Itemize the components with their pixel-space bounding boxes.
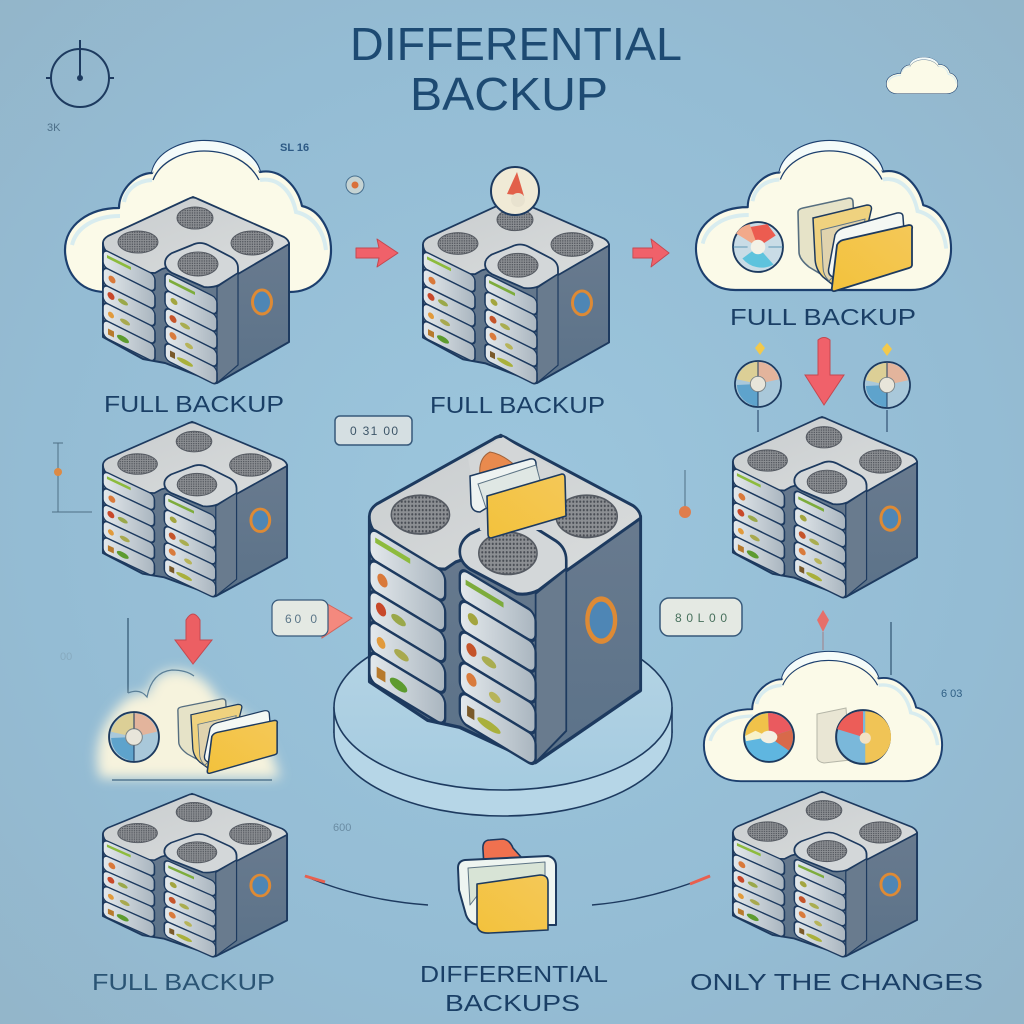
label: differential backups (420, 961, 608, 1016)
arrow: down left (175, 614, 212, 664)
arrow: first to second (356, 239, 398, 267)
server stack: bottom right (733, 792, 917, 958)
pie icon lower right 1 (744, 712, 794, 762)
title: DIFFERENTIAL (350, 18, 682, 70)
small tag top left: SL 16 (280, 142, 309, 154)
icon: small cloud top right (886, 57, 958, 94)
tag with arrow left of central server (272, 600, 352, 638)
tag above central server (335, 416, 412, 445)
small up indicator (817, 610, 829, 650)
label: full backup 4: FULL BACKUP (92, 969, 275, 995)
server stack: top middle (423, 199, 609, 385)
faint number right: 6 03 (941, 688, 962, 700)
label: full backup 1: FULL BACKUP (104, 391, 284, 417)
tag above central server: 0 31 00 (350, 424, 398, 438)
patch covering rear grille (468, 437, 552, 530)
cloud top right (696, 141, 951, 290)
faint number left: 00 (60, 651, 72, 663)
small orange indicator (346, 176, 364, 194)
connector left (305, 876, 428, 905)
blurred cloud lower left (97, 670, 280, 780)
pie icon lower left (109, 712, 159, 762)
pin left (127, 618, 129, 693)
server stack: top left (103, 197, 289, 386)
server stack: bottom left (103, 794, 287, 958)
icon: clock badge on top middle server (491, 167, 539, 215)
server stack: right middle (733, 417, 917, 599)
folder bottom center (458, 839, 556, 933)
cloud lower right (704, 652, 942, 781)
label: full backup 3: FULL BACKUP (730, 304, 916, 330)
title: BACKUP (410, 68, 608, 120)
platform under central server (334, 624, 672, 816)
central folder (470, 452, 566, 538)
arrow: down right (805, 338, 844, 405)
pie icon lower right 2 (836, 710, 891, 764)
pie icon with pin right (864, 343, 910, 432)
label: differential backups: DIFFERENTIAL (420, 961, 608, 987)
icon: clock (46, 40, 114, 107)
tab behind pie (817, 708, 850, 763)
cloud behind first server (65, 141, 331, 292)
right indicator with pin (679, 470, 691, 518)
server stack: left middle (103, 422, 287, 598)
title (350, 18, 682, 120)
label: only the changes: ONLY THE CHANGES (690, 969, 983, 995)
tag right of central server: 80L00 (675, 611, 727, 625)
clock caption: 3K (47, 122, 61, 134)
left indicator with pin (52, 443, 92, 512)
files and folder in top right cloud (798, 198, 912, 291)
connector right (592, 876, 710, 905)
pin right (890, 622, 892, 675)
faint number bottom: 600 (333, 822, 351, 834)
arrow: second to third (633, 239, 669, 267)
central server stack (369, 436, 641, 767)
label: full backup 2: FULL BACKUP (430, 392, 605, 418)
tag right of central server (660, 598, 742, 636)
label: differential backups: BACKUPS (445, 990, 580, 1016)
tag with arrow left of central server: 60 0 (285, 612, 317, 626)
files and folder lower left (178, 699, 277, 773)
pie icon with pin left (735, 342, 781, 432)
pie icon in cloud (733, 222, 783, 272)
